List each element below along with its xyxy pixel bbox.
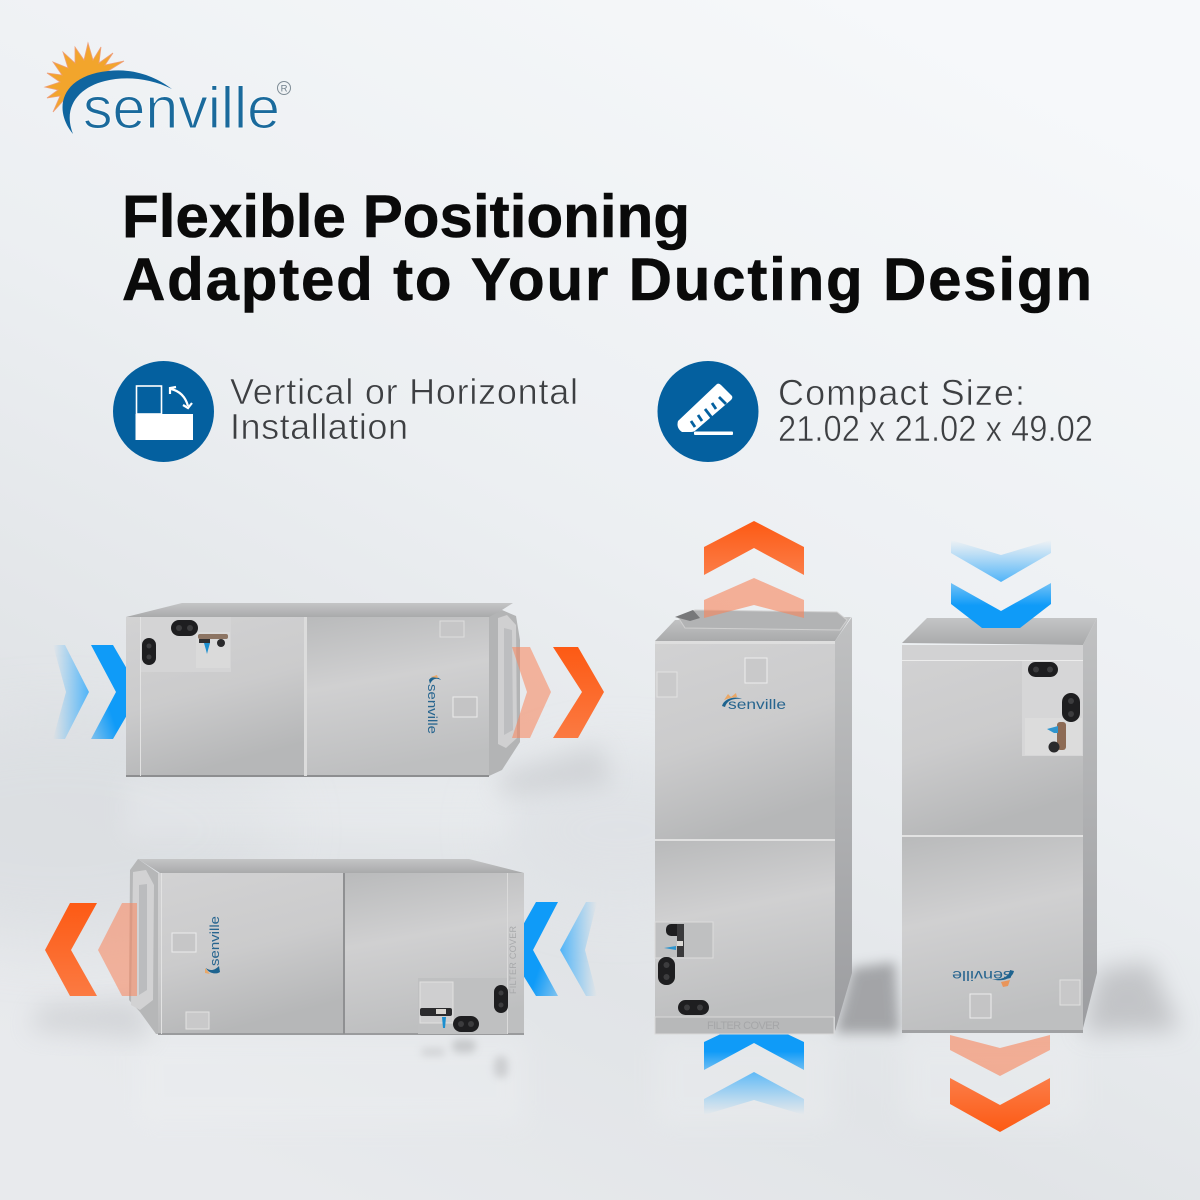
- service panel: [1022, 661, 1083, 756]
- air handler: horizontal top unit: [126, 603, 612, 795]
- front panel left: [126, 617, 305, 776]
- compact size text: [778, 372, 1093, 449]
- compact size text: 21.02 x 21.02 x 49.02: [778, 408, 1093, 449]
- upper panel: [655, 641, 835, 839]
- end frame: [129, 859, 158, 1034]
- air handler: horizontal bottom unit: [30, 859, 524, 1078]
- icon: ruler: [658, 361, 758, 462]
- service panel: [141, 617, 231, 672]
- knockout: [453, 697, 477, 717]
- front panel right: [345, 873, 524, 1034]
- black gasket vertical: [494, 985, 508, 1013]
- copper fittings: [420, 1008, 452, 1028]
- filter cover label: FILTER COVER: [508, 926, 518, 994]
- fittings: [664, 924, 684, 957]
- logo wordmark: senville: [83, 76, 280, 141]
- unit logo: senville: [207, 916, 222, 966]
- arrow: orange exhaust horizontal bottom: [45, 903, 137, 996]
- front panel left: [158, 873, 343, 1034]
- side plate: [1060, 980, 1080, 1005]
- air handler: vertical middle unit: [655, 610, 900, 1034]
- upper panel: [902, 645, 1083, 835]
- small plate: [440, 621, 464, 637]
- unit logo: [205, 916, 222, 974]
- copper fittings: [198, 634, 228, 654]
- filter band: [655, 1017, 834, 1034]
- arrow: blue intake horizontal bottom: [523, 902, 597, 996]
- arrow: orange exhaust up: [704, 521, 804, 618]
- lower panel: [655, 841, 835, 1017]
- knockout: [172, 933, 196, 952]
- front panel right: [306, 617, 489, 776]
- installation text: Vertical or Horizontal: [230, 371, 578, 412]
- knockout: [970, 994, 991, 1018]
- unit logo: senville: [952, 968, 1012, 984]
- unit logo: senville: [728, 696, 786, 712]
- black gasket vertical: [658, 957, 675, 985]
- logo swoosh: [63, 70, 172, 134]
- fittings: [1047, 722, 1066, 752]
- unit logo: [425, 675, 441, 734]
- black gasket horizontal: [171, 620, 198, 636]
- side face: [835, 617, 852, 1031]
- service panel: [655, 922, 713, 958]
- side plate: [657, 672, 677, 697]
- black gasket vertical: [1062, 693, 1080, 722]
- knockout: [745, 658, 767, 683]
- black gasket horizontal: [453, 1016, 479, 1032]
- black gasket horizontal: [678, 1000, 709, 1015]
- title: [122, 183, 1092, 313]
- arrow: blue intake horizontal top: [53, 645, 127, 739]
- black gasket vertical: [142, 638, 156, 665]
- arrow: orange exhaust down: [950, 1035, 1050, 1132]
- black gasket horizontal: [1028, 662, 1058, 677]
- top face: [655, 617, 851, 641]
- unit logo: senville: [425, 684, 440, 734]
- title: Flexible Positioning: [122, 183, 690, 250]
- logo registered mark: [278, 82, 290, 94]
- shadow: [500, 745, 612, 795]
- arrow: blue intake down: [951, 540, 1051, 628]
- filter cover label: FILTER COVER: [707, 1020, 780, 1032]
- unit logo: [722, 693, 786, 712]
- shadow: [1083, 962, 1180, 1033]
- filter band: [902, 645, 1083, 661]
- title: Adapted to Your Ducting Design: [122, 246, 1092, 313]
- logo sun: [45, 43, 124, 112]
- top flange: [678, 610, 847, 630]
- top face: [126, 603, 513, 617]
- unit logo: [952, 968, 1014, 987]
- compact size text: Compact Size:: [778, 372, 1025, 413]
- brand logo: [45, 43, 290, 141]
- side face: [1083, 618, 1097, 1028]
- icon: vertical or horizontal rotation: [113, 361, 214, 462]
- installation text: Installation: [230, 406, 408, 447]
- arrow: orange exhaust horizontal top: [512, 647, 604, 738]
- arrow: blue intake up: [704, 1033, 804, 1115]
- top face: [138, 859, 524, 873]
- top face: [902, 618, 1097, 645]
- air handler: vertical right unit: [902, 618, 1180, 1033]
- shadow: [835, 962, 900, 1033]
- shadow: [30, 1000, 150, 1040]
- logo registered mark: R: [281, 84, 288, 94]
- small plate: [186, 1012, 209, 1029]
- service panel: [418, 978, 507, 1034]
- reflection: [421, 1039, 508, 1078]
- installation text: [230, 371, 578, 447]
- end frame: [489, 610, 520, 776]
- lower panel: [902, 837, 1083, 1033]
